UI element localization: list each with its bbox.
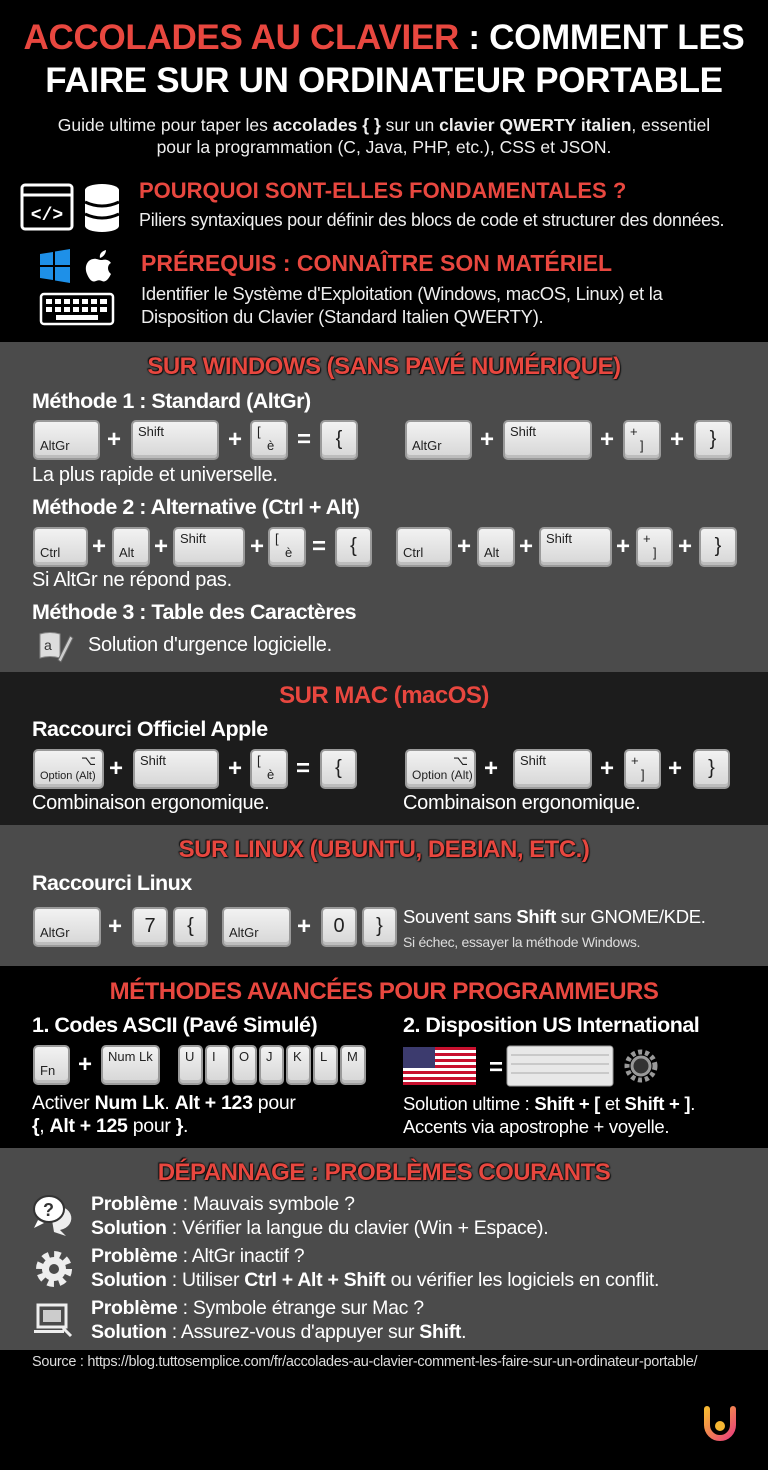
method 3 note: Solution d'urgence logicielle. — [88, 634, 332, 656]
method 2 keys: Alt — [484, 545, 499, 560]
heading: troubleshooting: DÉPANNAGE : PROBLÈMES COURANTS — [158, 1159, 610, 1186]
problem 2 — [91, 1245, 659, 1291]
us intl note: Accents via apostrophe + voyelle. — [403, 1116, 669, 1137]
linux small note: Si échec, essayer la méthode Windows. — [403, 934, 640, 950]
icon: windows apple keyboard — [40, 249, 114, 326]
method 2 keys: Shift — [180, 531, 206, 546]
linux subtitle: Raccourci Linux — [32, 871, 192, 895]
ascii keys: + — [78, 1051, 92, 1078]
method 2 keys: { — [350, 535, 357, 557]
text: prérequis: Identifier le Système d'Exploitation (Windows, macOS, Linux) et la — [141, 283, 662, 304]
icon: code window and database — [20, 184, 119, 232]
mac keys: Shift — [520, 753, 546, 768]
method 1 note: La plus rapide et universelle. — [32, 464, 278, 486]
icon: character map — [40, 632, 74, 662]
linux keys: AltGr — [229, 925, 259, 940]
ascii note: Activer Num Lk. Alt + 123 pour — [32, 1092, 296, 1114]
method 1 keys: } — [710, 428, 716, 450]
linux keys — [33, 907, 397, 947]
title: FAIRE SUR UN ORDINATEUR PORTABLE — [45, 61, 723, 100]
problem 1: Solution : Vérifier la langue du clavier (Win + Espace). — [91, 1217, 548, 1239]
mac keys: ⌥ — [453, 753, 468, 768]
problem 2: Problème : AltGr inactif ? — [91, 1245, 304, 1267]
us intl note — [403, 1093, 695, 1137]
heading: advanced: MÉTHODES AVANCÉES POUR PROGRAMMEURS — [110, 978, 658, 1005]
problem 3 — [91, 1297, 466, 1343]
icon: gear — [36, 1251, 72, 1287]
text: prérequis — [141, 283, 663, 327]
linux note: Souvent sans Shift sur GNOME/KDE. — [403, 906, 706, 927]
method 1 keys: è — [267, 438, 274, 453]
ascii keys: J — [266, 1049, 272, 1064]
mac keys — [33, 749, 730, 789]
method 1 keys: + — [480, 426, 494, 453]
method 2 keys: + — [616, 533, 630, 560]
ascii keys: I — [212, 1049, 216, 1064]
method 2 note: Si AltGr ne répond pas. — [32, 569, 232, 591]
section: linux background — [0, 825, 768, 966]
method 2 keys: ] — [653, 545, 657, 560]
problem 3: Solution : Assurez-vous d'appuyer sur Shift. — [91, 1321, 466, 1343]
problem 1: Problème : Mauvais symbole ? — [91, 1193, 355, 1215]
source: Source : https://blog.tuttosemplice.com/fr/accolades-au-clavier-comment-les-faire-sur-un-ordinateur-portable/ — [32, 1354, 697, 1370]
heading: linux: SUR LINUX (UBUNTU, DEBIAN, ETC.) — [179, 836, 589, 863]
problem 2: Solution : Utiliser Ctrl + Alt + Shift ou vérifier les logiciels en conflit. — [91, 1269, 659, 1291]
mac notes: Combinaison ergonomique. — [32, 792, 269, 814]
subtitle: Guide ultime pour taper les accolades { } sur un clavier QWERTY italien, essentiel — [58, 115, 710, 135]
mac subtitle: Raccourci Officiel Apple — [32, 717, 268, 741]
text: prérequis: Disposition du Clavier (Standard Italien QWERTY). — [141, 306, 543, 327]
section: mac background — [0, 672, 768, 825]
method 1 keys: + — [228, 426, 242, 453]
method 1 keys: + — [107, 426, 121, 453]
mac keys: { — [335, 757, 342, 779]
method 1 keys: + — [600, 426, 614, 453]
method 2 keys — [33, 527, 737, 567]
mac keys: Shift — [140, 753, 166, 768]
method 1 title: Méthode 1 : Standard (AltGr) — [32, 389, 311, 413]
mac keys: ] — [641, 767, 645, 782]
method 1 keys: { — [336, 428, 342, 450]
section: advanced background — [0, 966, 768, 1148]
heading: pourquoi: POURQUOI SONT-ELLES FONDAMENTALES ? — [139, 178, 626, 203]
ascii keys: O — [239, 1049, 249, 1064]
logo — [704, 1406, 736, 1441]
ascii keys: M — [347, 1049, 358, 1064]
linux keys: { — [187, 915, 194, 937]
method 1 keys: AltGr — [40, 438, 70, 453]
ascii subtitle: 1. Codes ASCII (Pavé Simulé) — [32, 1013, 317, 1037]
ascii keys: Fn — [40, 1063, 55, 1078]
method 2 keys: + — [92, 533, 106, 560]
problem 1 — [91, 1193, 548, 1239]
heading: mac: SUR MAC (macOS) — [279, 682, 489, 709]
us intl subtitle: 2. Disposition US International — [403, 1013, 699, 1037]
method 2 keys: + — [250, 533, 264, 560]
method 2 keys: + — [154, 533, 168, 560]
title: ACCOLADES AU CLAVIER : COMMENT LES — [24, 18, 744, 57]
section: windows background — [0, 342, 768, 672]
mac keys: Option (Alt) — [412, 768, 473, 782]
method 1 keys: + — [670, 426, 684, 453]
icon: mac laptop — [34, 1304, 72, 1337]
method 1 keys: = — [297, 426, 311, 453]
ascii keys: U — [185, 1049, 194, 1064]
method 2 keys: + — [457, 533, 471, 560]
mac keys: è — [267, 767, 274, 782]
ascii keys — [33, 1045, 366, 1085]
heading: prérequis: PRÉREQUIS : CONNAÎTRE SON MATÉRIEL — [141, 250, 612, 276]
linux keys: 7 — [144, 915, 156, 937]
title — [24, 18, 744, 100]
icon: us flag keyboard gear: = — [489, 1054, 503, 1081]
mac notes — [32, 792, 640, 814]
section: top background — [0, 0, 768, 342]
text: pourquoi: Piliers syntaxiques pour définir des blocs de code et structurer des données. — [139, 210, 724, 230]
method 2 keys: Ctrl — [403, 545, 423, 560]
heading: windows: SUR WINDOWS (SANS PAVÉ NUMÉRIQUE) — [147, 353, 621, 380]
icon: question bubbles: ? — [43, 1200, 54, 1220]
problem 3: Problème : Symbole étrange sur Mac ? — [91, 1297, 424, 1319]
icon: character map: a — [44, 637, 52, 653]
method 2 keys: Alt — [119, 545, 134, 560]
mac keys: + — [668, 755, 682, 782]
method 2 keys: + — [678, 533, 692, 560]
us intl note: Solution ultime : Shift + [ et Shift + ]. — [403, 1093, 695, 1114]
method 2 keys: Shift — [546, 531, 572, 546]
linux keys: + — [108, 913, 122, 940]
linux keys: AltGr — [40, 925, 70, 940]
linux keys: } — [376, 915, 383, 937]
mac keys: + — [484, 755, 498, 782]
mac keys: + — [600, 755, 614, 782]
linux keys: 0 — [333, 915, 345, 937]
method 2 title: Méthode 2 : Alternative (Ctrl + Alt) — [32, 495, 359, 519]
method 1 keys: Shift — [138, 424, 164, 439]
mac keys: } — [708, 757, 715, 779]
method 2 keys: Ctrl — [40, 545, 60, 560]
section: troubleshooting background — [0, 1148, 768, 1350]
mac keys: + — [228, 755, 242, 782]
icon: question bubbles — [33, 1195, 72, 1236]
method 1 keys: ] — [640, 438, 644, 453]
mac keys: ⌥ — [81, 753, 96, 768]
method 1 keys — [33, 420, 732, 460]
mac keys: + — [631, 753, 639, 768]
method 2 keys: + — [643, 531, 651, 546]
mac keys: [ — [257, 753, 261, 768]
ascii note — [32, 1092, 296, 1137]
method 2 keys: è — [285, 545, 292, 560]
ascii keys: L — [320, 1049, 327, 1064]
method 1 keys: [ — [257, 424, 261, 439]
ascii note: {, Alt + 125 pour }. — [32, 1115, 188, 1137]
method 1 keys: + — [630, 424, 638, 439]
ascii keys: Num Lk — [108, 1049, 153, 1064]
method 2 keys: } — [715, 535, 721, 557]
method 2 keys: + — [519, 533, 533, 560]
subtitle — [58, 115, 710, 157]
icon: us flag keyboard gear — [403, 1046, 658, 1086]
icon: code window and database: </> — [31, 206, 63, 226]
method 3 title: Méthode 3 : Table des Caractères — [32, 600, 356, 624]
mac keys: = — [296, 755, 310, 782]
text: Combinaison ergonomique. — [403, 792, 640, 814]
method 1 keys: AltGr — [412, 438, 442, 453]
mac keys: Option (Alt) — [40, 770, 96, 782]
method 2 keys: [ — [275, 531, 279, 546]
subtitle: pour la programmation (C, Java, PHP, etc.), CSS et JSON. — [157, 137, 611, 157]
linux keys: + — [297, 913, 311, 940]
mac keys: + — [109, 755, 123, 782]
ascii keys: K — [293, 1049, 302, 1064]
method 2 keys: = — [312, 533, 326, 560]
method 1 keys: Shift — [510, 424, 536, 439]
